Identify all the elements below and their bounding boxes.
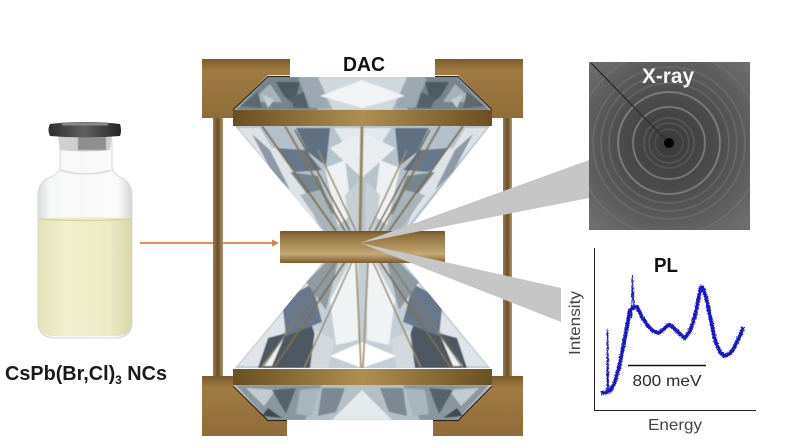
orange arrow xyxy=(140,240,279,246)
vial of nanocrystals xyxy=(38,122,132,338)
label: sample name: 3 xyxy=(115,373,122,387)
X-ray label: X-ray xyxy=(642,65,694,88)
lower bracket right xyxy=(433,376,523,436)
title: DAC: DAC xyxy=(343,54,385,76)
grey beam to PL spectrum xyxy=(360,243,561,322)
spectrum curve xyxy=(601,276,743,393)
lower girdle band xyxy=(233,369,492,385)
vial cap xyxy=(48,122,121,138)
lower diamond crown xyxy=(230,384,495,421)
vial crimp xyxy=(58,136,112,152)
upper bracket right xyxy=(435,59,523,118)
label: sample name: CsPb(Br,Cl) xyxy=(5,363,116,385)
left rod xyxy=(213,116,223,378)
lower bracket left xyxy=(202,376,287,436)
upper diamond crown xyxy=(234,77,491,110)
scale bar xyxy=(628,364,706,366)
label: sample name: NCs xyxy=(122,363,167,385)
upper crown edge xyxy=(233,76,492,110)
upper girdle band xyxy=(233,110,492,126)
axes xyxy=(594,248,756,410)
diamond anvil cell xyxy=(202,59,523,436)
y axis label: Intensity xyxy=(567,291,584,355)
scale label: 800 meV xyxy=(632,373,702,390)
vial glass body xyxy=(38,140,132,338)
beam stop xyxy=(591,63,669,143)
cap highlight xyxy=(62,122,108,126)
X-ray diffraction pattern xyxy=(589,62,750,230)
PL spectrum chart xyxy=(567,248,756,434)
diffraction rings xyxy=(589,62,750,230)
beam centre xyxy=(664,138,674,148)
lower diamond pavilion xyxy=(232,260,492,370)
grey beam to X-ray pattern xyxy=(360,160,589,243)
upper bracket left xyxy=(202,59,290,118)
x axis label: Energy xyxy=(648,417,702,434)
gasket xyxy=(280,231,445,263)
liquid meniscus xyxy=(39,219,131,220)
lower crown edge xyxy=(233,386,492,420)
vial neck shading xyxy=(60,170,112,174)
right rod xyxy=(503,116,512,378)
upper diamond pavilion xyxy=(232,124,492,234)
PL title: PL xyxy=(654,255,678,277)
liquid xyxy=(38,217,132,336)
